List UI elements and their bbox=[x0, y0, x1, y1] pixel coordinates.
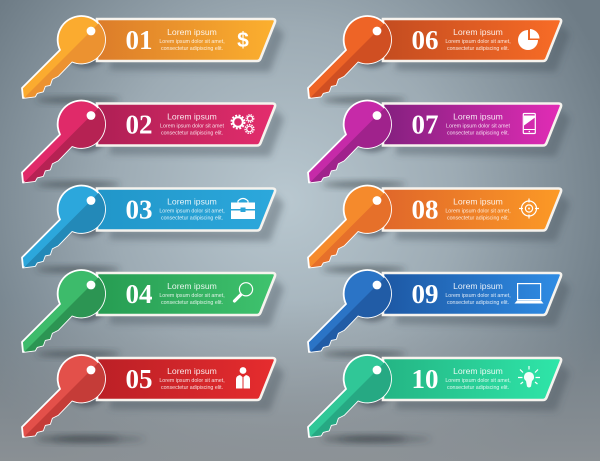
number 09: 09 bbox=[412, 279, 438, 309]
text block 01 bbox=[159, 27, 225, 52]
key 07 bbox=[307, 100, 392, 184]
text block 08: consectetur adipiscing elit. bbox=[447, 216, 509, 222]
text block 06: Lorem ipsum dolor sit amet, bbox=[445, 39, 511, 45]
text block 01: Lorem ipsum bbox=[167, 27, 217, 37]
text block 03 bbox=[159, 196, 225, 222]
text block 05: Lorem ipsum dolor sit amet, bbox=[159, 378, 225, 384]
text block 07: Lorem ipsum bbox=[453, 112, 503, 122]
item 09: blue key with laptop label bbox=[308, 254, 570, 357]
text block 06 bbox=[445, 27, 511, 52]
item 04: green key with magnifier label bbox=[22, 254, 284, 357]
text block 09: Lorem ipsum bbox=[453, 281, 503, 291]
text block 04: Lorem ipsum dolor sit amet, bbox=[159, 293, 225, 299]
text block 04: Lorem ipsum bbox=[167, 281, 217, 291]
number 04: 04 bbox=[126, 279, 152, 309]
text block 04: consectetur adipiscing elit. bbox=[161, 300, 223, 306]
text block 07 bbox=[446, 112, 510, 136]
number 06: 06 bbox=[412, 25, 438, 55]
text block 02: consectetur adipiscing elit. bbox=[161, 130, 223, 136]
key 04 bbox=[21, 269, 106, 353]
item 10: teal key with light bulb label bbox=[308, 339, 570, 442]
text block 10 bbox=[445, 366, 511, 391]
text block 04 bbox=[159, 281, 225, 306]
text block 03: consectetur adipiscing elit. bbox=[161, 216, 223, 222]
text block 09: Lorem ipsum dolor sit amet, bbox=[445, 293, 511, 299]
text block 10: Lorem ipsum bbox=[453, 366, 503, 376]
key 03 bbox=[21, 184, 106, 268]
icon: laptop bbox=[514, 284, 544, 304]
item 08: orange key with target label bbox=[308, 170, 570, 272]
key 08 bbox=[307, 184, 392, 268]
text block 08: Lorem ipsum bbox=[453, 196, 503, 206]
text block 03: Lorem ipsum dolor sit amet, bbox=[159, 208, 225, 214]
item 07: purple key with phone label bbox=[308, 84, 570, 187]
text block 07: Lorem ipsum dolor sit amet bbox=[446, 124, 510, 130]
key 05 bbox=[21, 354, 106, 438]
key 06 bbox=[307, 15, 392, 99]
text block 01: consectetur adipiscing elit. bbox=[161, 46, 223, 52]
key 02 bbox=[21, 100, 106, 184]
text block 10: Lorem ipsum dolor sit amet, bbox=[445, 378, 511, 384]
text block 02 bbox=[160, 112, 224, 136]
text block 08 bbox=[445, 196, 511, 222]
icon: pie chart bbox=[518, 29, 540, 50]
icon: light bulb bbox=[518, 366, 540, 388]
icon: target bbox=[519, 198, 539, 218]
item 02: pink key with gears label bbox=[22, 84, 284, 187]
text block 06: consectetur adipiscing elit. bbox=[447, 46, 509, 52]
icon: magnifier bbox=[234, 283, 253, 301]
text block 06: Lorem ipsum bbox=[453, 27, 503, 37]
text block 05: consectetur adipiscing elit. bbox=[161, 385, 223, 391]
key 09 bbox=[307, 269, 392, 353]
text block 03: Lorem ipsum bbox=[167, 196, 217, 206]
key 01 bbox=[21, 15, 106, 99]
number 05: 05 bbox=[126, 364, 152, 394]
text block 08: Lorem ipsum dolor sit amet, bbox=[445, 208, 511, 214]
icon: phone bbox=[523, 114, 535, 134]
icon: gears bbox=[231, 115, 254, 133]
text block 05 bbox=[159, 366, 225, 391]
item 03: blue key with briefcase label bbox=[22, 170, 284, 272]
key 10 bbox=[307, 354, 392, 438]
text block 07: consectetur adipiscing elit. bbox=[447, 130, 509, 136]
number 03: 03 bbox=[126, 194, 152, 224]
number 02: 02 bbox=[126, 110, 152, 140]
text block 02: Lorem ipsum bbox=[167, 112, 217, 122]
text block 01: Lorem ipsum dolor sit amet, bbox=[159, 39, 225, 45]
number 08: 08 bbox=[412, 194, 438, 224]
text block 05: Lorem ipsum bbox=[167, 366, 217, 376]
text block 09 bbox=[445, 281, 511, 306]
number 10: 10 bbox=[412, 364, 438, 394]
icon: briefcase bbox=[231, 198, 255, 219]
item 05: red key with person label bbox=[22, 339, 284, 442]
text block 09: consectetur adipiscing elit. bbox=[447, 300, 509, 306]
icon: dollar: $ bbox=[237, 29, 249, 52]
number 01: 01 bbox=[126, 25, 152, 55]
number 07: 07 bbox=[412, 110, 438, 140]
item 06: red-orange key with pie chart label bbox=[308, 0, 570, 103]
text block 02: Lorem ipsum dolor sit amet bbox=[160, 124, 224, 130]
text block 10: consectetur adipiscing elit. bbox=[447, 385, 509, 391]
icon: person bbox=[236, 367, 250, 388]
item 01: orange key with dollar label bbox=[22, 0, 284, 103]
